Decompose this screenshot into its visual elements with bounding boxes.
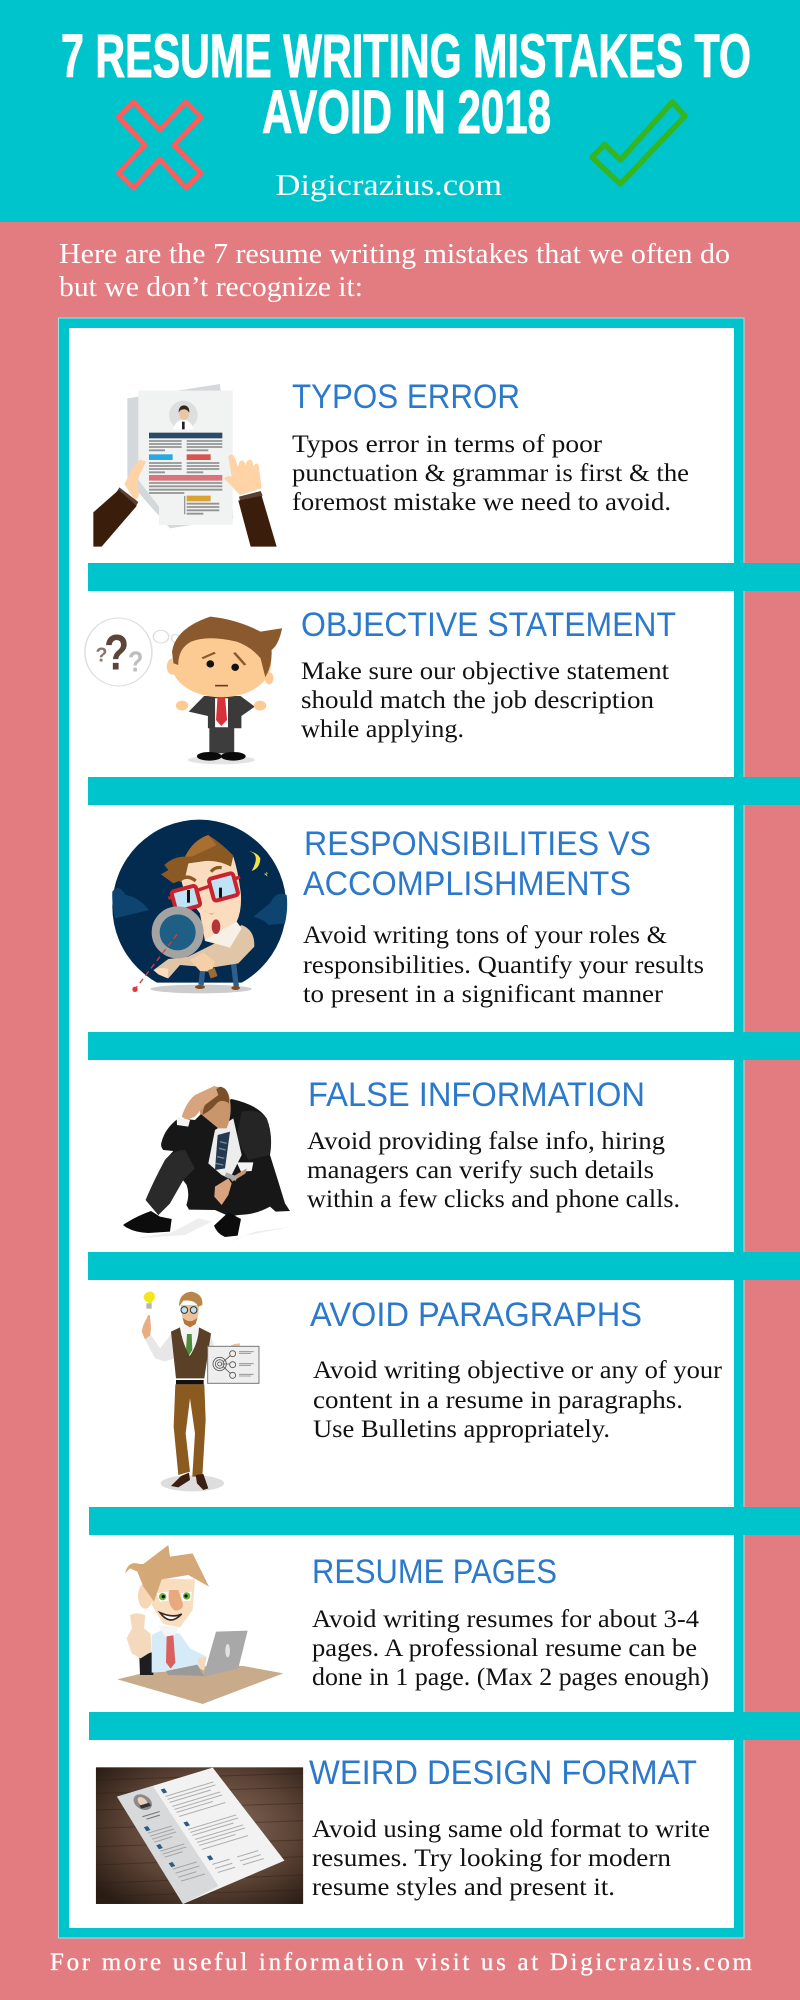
divider bars — [88, 563, 800, 1740]
icon: happy man with laptop — [117, 1545, 283, 1704]
heading: typos error: TYPOS ERROR — [292, 378, 520, 416]
body: responsibilities: responsibilities. Quantify your results — [303, 952, 704, 979]
heading: responsibilities vs accomplishments: RESPONSIBILITIES VS — [304, 825, 651, 863]
heading: false information: FALSE INFORMATION — [308, 1076, 645, 1114]
image: resume on wooden desk — [96, 1767, 303, 1904]
body: resume pages: pages. A professional resume can be — [312, 1635, 697, 1662]
section 2: objective statement — [85, 606, 676, 764]
body: resume pages: done in 1 page. (Max 2 pages enough) — [312, 1664, 709, 1691]
intro text: but we don’t recognize it: — [59, 272, 363, 303]
heading: resume pages: RESUME PAGES — [312, 1553, 557, 1591]
icon: red cross — [118, 102, 201, 188]
body: resume pages — [312, 1606, 709, 1691]
heading: responsibilities vs accomplishments: ACCOMPLISHMENTS — [303, 865, 631, 903]
icon: green check — [592, 102, 685, 184]
body: objective statement: should match the job description — [301, 687, 655, 714]
body: responsibilities: Avoid writing tons of your roles & — [303, 922, 667, 949]
body: false information: managers can verify such details — [307, 1157, 654, 1184]
body: avoid paragraphs: Use Bulletins appropriately. — [313, 1416, 610, 1443]
body: responsibilities: to present in a significant manner — [303, 981, 664, 1008]
body: weird design format: Avoid using same old format to write — [312, 1816, 710, 1843]
body: false information — [307, 1128, 680, 1213]
body: avoid paragraphs: content in a resume in paragraphs. — [313, 1387, 683, 1414]
icon: stressed man in suit — [123, 1086, 292, 1243]
heading: responsibilities vs accomplishments — [303, 825, 651, 903]
intro text: Here are the 7 resume writing mistakes that we often do — [59, 239, 730, 270]
heading: weird design format: WEIRD DESIGN FORMAT — [309, 1754, 697, 1792]
footer text: For more useful information visit us at Digicrazius.com — [50, 1949, 753, 1976]
panel: frame — [58, 318, 744, 1938]
icon: confused man with question bubble: ? — [95, 644, 107, 666]
section 4: false information — [123, 1076, 680, 1243]
section 3: responsibilities vs accomplishments — [112, 820, 704, 1008]
section 5: avoid paragraphs — [142, 1292, 723, 1491]
section 6: resume pages — [117, 1545, 709, 1704]
section 7: weird design format — [96, 1754, 710, 1904]
body: responsibilities — [303, 922, 704, 1008]
icon: man with magnifying glass — [112, 820, 287, 994]
body: typos error: foremost mistake we need to avoid. — [292, 489, 671, 516]
body: avoid paragraphs: Avoid writing objective or any of your — [313, 1357, 723, 1384]
icon: confused man with question bubble: ? — [128, 647, 143, 678]
icon: confused man with question bubble — [85, 617, 282, 764]
heading: avoid paragraphs: AVOID PARAGRAPHS — [310, 1296, 642, 1334]
header band — [0, 0, 800, 222]
title: AVOID IN 2018 — [262, 78, 551, 146]
body: typos error — [292, 431, 689, 516]
body: false information: Avoid providing false info, hiring — [307, 1128, 666, 1155]
body: resume pages: Avoid writing resumes for about 3-4 — [312, 1606, 700, 1633]
body: typos error: Typos error in terms of poor — [292, 431, 603, 458]
section 1: typos error — [93, 378, 689, 547]
body: weird design format — [312, 1816, 710, 1901]
body: avoid paragraphs — [313, 1357, 723, 1443]
icon: confused man with question bubble: ? — [104, 625, 129, 681]
body: false information: within a few clicks and phone calls. — [307, 1186, 680, 1213]
panel: content background — [69, 328, 734, 1928]
body: objective statement: while applying. — [301, 716, 464, 743]
body: typos error: punctuation & grammar is first & the — [292, 460, 689, 487]
icon: resume held in hands — [93, 384, 277, 547]
heading: objective statement: OBJECTIVE STATEMENT — [301, 606, 676, 644]
title — [61, 22, 751, 146]
intro text — [59, 239, 730, 303]
body: objective statement: Make sure our objective statement — [301, 658, 669, 685]
body: weird design format: resumes. Try looking for modern — [312, 1845, 672, 1872]
site name: Digicrazius.com — [276, 167, 502, 202]
body: objective statement — [301, 658, 669, 743]
icon: man with idea bulb and chart board — [142, 1292, 259, 1491]
body: weird design format: resume styles and present it. — [312, 1874, 615, 1901]
